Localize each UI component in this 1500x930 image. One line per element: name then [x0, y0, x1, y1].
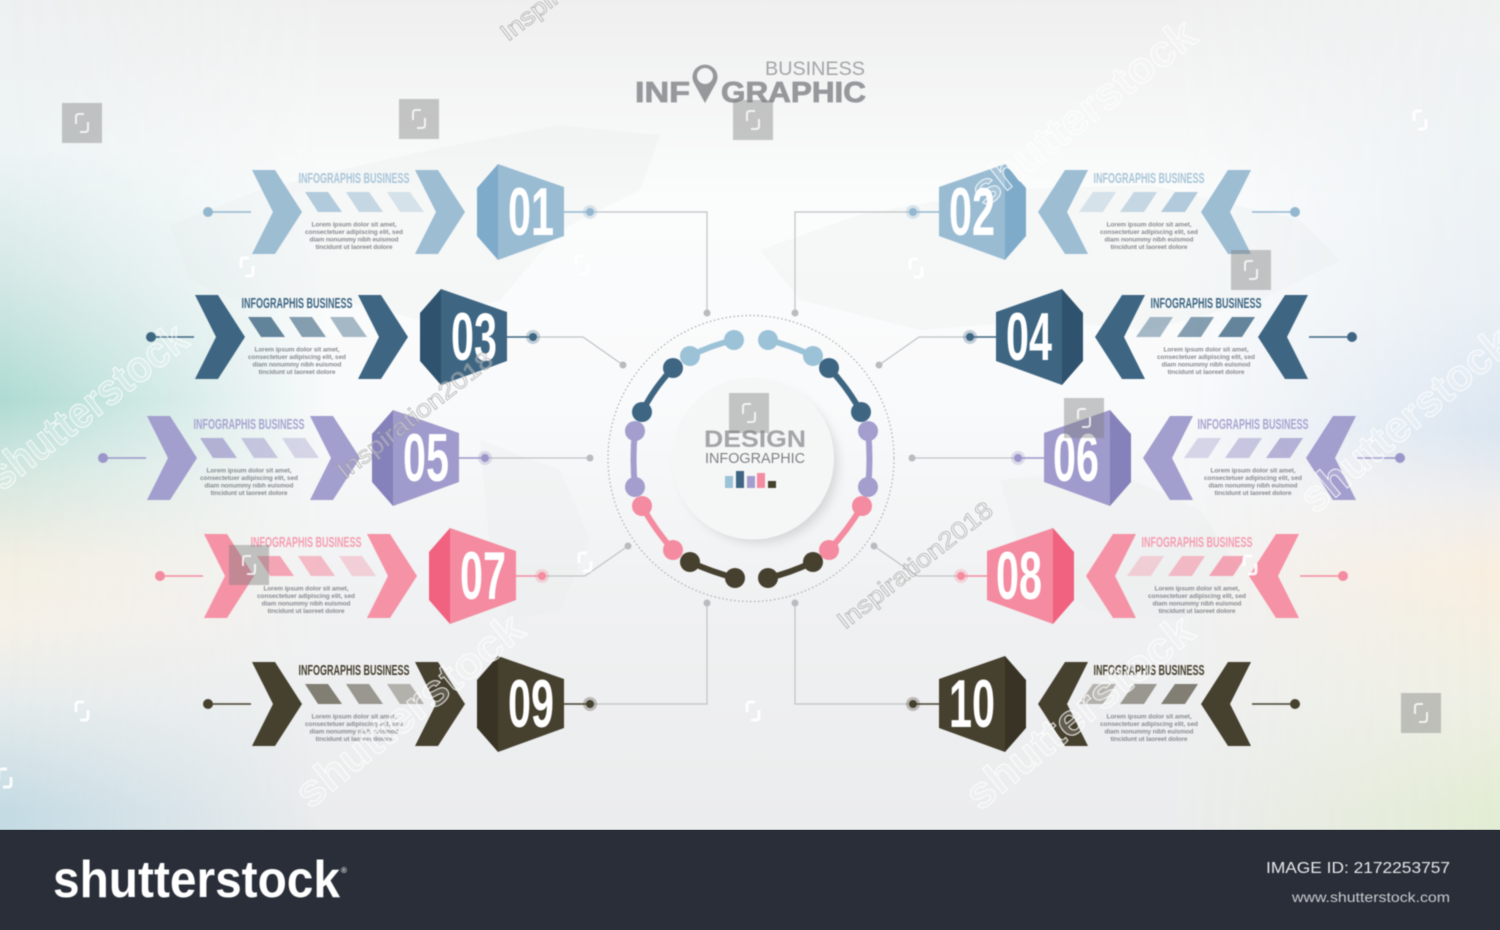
- website: www.shutterstock.com: [1291, 889, 1450, 905]
- step 08 body text: [1148, 586, 1246, 615]
- step 06 body text: Lorem ipsum dolor sit amet,: [1210, 468, 1296, 474]
- title: business infographic: [635, 58, 866, 109]
- watermark text: shutterstock: [961, 9, 1206, 216]
- step 02 body text: [1100, 222, 1198, 251]
- stock watermarks: shutterstock: [955, 605, 1204, 820]
- watermark square icons: [62, 99, 1441, 733]
- faint world map: [170, 125, 1340, 620]
- centre disc: [672, 378, 834, 540]
- step 01 body text: diam nonummy nibh euismod: [310, 236, 399, 244]
- step 10: [792, 600, 1300, 752]
- step 06 heading: INFOGRAPHIS BUSINESS: [1198, 416, 1308, 433]
- footer background: [0, 830, 1500, 930]
- step 10 body text: diam nonummy nibh euismod: [1104, 728, 1194, 736]
- registered mark: ®: [341, 866, 347, 875]
- stock watermarks: shutterstock: [285, 603, 534, 818]
- step 01 body text: tincidunt ut laoreet dolore: [316, 244, 393, 251]
- step 04 body text: tincidunt ut laoreet dolore: [1168, 369, 1245, 376]
- background gradient left: [0, 0, 750, 830]
- step 09: [203, 600, 710, 752]
- step 07 body text: diam nonummy nibh euismod: [262, 600, 351, 608]
- step 10 number: 10: [949, 666, 995, 742]
- step 01 body text: consectetuer adipiscing elit, sed: [305, 229, 403, 236]
- step 03 body text: [248, 346, 346, 376]
- step 07 body text: tincidunt ut laoreet dolore: [268, 608, 345, 615]
- step 07 body text: consectetuer adipiscing elit, sed: [257, 593, 355, 600]
- ring segment: brown: [680, 552, 823, 588]
- step 09 body text: diam nonummy nibh euismod: [310, 728, 399, 736]
- title word: graphic: GRAPHIC: [721, 77, 866, 109]
- image id: IMAGE ID: 2172253757: [1266, 860, 1450, 877]
- step 03 body text: tincidunt ut laoreet dolore: [258, 369, 336, 376]
- background centre glow: [41, 118, 1401, 830]
- step 10 body text: tincidunt ut laoreet dolore: [1110, 736, 1188, 743]
- step 09 body text: Lorem ipsum dolor sit amet,: [312, 714, 397, 720]
- step 06 body text: diam nonummy nibh euismod: [1208, 482, 1298, 490]
- step 10 heading: INFOGRAPHIS BUSINESS: [1094, 662, 1204, 679]
- step 04 shapes: [876, 289, 1357, 385]
- step 02 heading: INFOGRAPHIS BUSINESS: [1094, 170, 1204, 187]
- step 07 number: 07: [460, 538, 506, 614]
- step 07 shapes: [155, 528, 632, 624]
- step 06 shapes: [908, 410, 1405, 506]
- step 04 body text: consectetuer adipiscing elit, sed: [1157, 354, 1255, 361]
- title word: inf: INF: [635, 77, 690, 109]
- step 05 heading: INFOGRAPHIS BUSINESS: [194, 416, 304, 433]
- step 02 number: 02: [949, 174, 995, 250]
- step 10 shapes: [792, 600, 1300, 752]
- step 06 body text: tincidunt ut laoreet dolore: [1214, 490, 1292, 497]
- step 07 body text: [257, 586, 355, 615]
- step 06 number: 06: [1053, 420, 1099, 496]
- step 09 body text: [305, 714, 403, 743]
- step 01 shapes: [203, 164, 710, 316]
- watermark outline icons: [0, 111, 1426, 787]
- step 10 body text: [1100, 714, 1198, 743]
- step 05: [98, 410, 594, 506]
- step 05 body text: tincidunt ut laoreet dolore: [210, 490, 288, 497]
- step 09 body text: consectetuer adipiscing elit, sed: [305, 721, 403, 728]
- step 05 body text: [200, 468, 298, 497]
- step 01 heading: INFOGRAPHIS BUSINESS: [298, 170, 410, 187]
- step 07 heading: INFOGRAPHIS BUSINESS: [250, 534, 362, 551]
- step 07: [155, 528, 632, 624]
- step 02 body text: diam nonummy nibh euismod: [1104, 236, 1194, 244]
- stock watermarks: Inspiration2018: [832, 496, 998, 635]
- mini bar chart: [725, 471, 776, 488]
- step 09 number: 09: [508, 666, 554, 742]
- step 08 body text: Lorem ipsum dolor sit amet,: [1154, 586, 1240, 592]
- step 02 body text: Lorem ipsum dolor sit amet,: [1106, 222, 1192, 228]
- step 02 shapes: [792, 164, 1300, 316]
- step 09 body text: tincidunt ut laoreet dolore: [316, 736, 393, 743]
- step 08 body text: tincidunt ut laoreet dolore: [1158, 608, 1236, 615]
- step 02 body text: tincidunt ut laoreet dolore: [1110, 244, 1188, 251]
- step 02: [792, 164, 1300, 316]
- step 03 shapes: [146, 289, 626, 385]
- ring segment: dark blue: [632, 358, 871, 422]
- step 09 shapes: [203, 600, 710, 752]
- step 03 body text: Lorem ipsum dolor sit amet,: [254, 346, 340, 354]
- step 05 body text: consectetuer adipiscing elit, sed: [200, 475, 298, 482]
- title word: business: BUSINESS: [765, 58, 865, 80]
- step 04 body text: diam nonummy nibh euismod: [1162, 362, 1251, 368]
- step 01: [203, 164, 710, 316]
- dotted outer circle: [608, 316, 894, 602]
- background gradient right: [750, 0, 1500, 830]
- step 03 body text: diam nonummy nibh euismod: [252, 362, 342, 368]
- step 03 number: 03: [451, 299, 497, 375]
- ring segment: light blue: [680, 330, 823, 366]
- step 01 body text: [305, 222, 403, 251]
- ring segment: pink: [632, 496, 872, 560]
- step 05 body text: diam nonummy nibh euismod: [204, 482, 294, 490]
- central ring diagram: [608, 316, 894, 602]
- ring segment: purple: [625, 421, 878, 497]
- step 08 number: 08: [996, 538, 1042, 614]
- step 06 body text: consectetuer adipiscing elit, sed: [1204, 475, 1302, 482]
- step 08 body text: diam nonummy nibh euismod: [1152, 600, 1242, 608]
- step 04 number: 04: [1006, 299, 1052, 375]
- step 07 body text: Lorem ipsum dolor sit amet,: [264, 586, 349, 592]
- step 08 body text: consectetuer adipiscing elit, sed: [1148, 593, 1246, 600]
- footer bar: [0, 830, 1500, 930]
- step 08: [870, 528, 1348, 624]
- step 08 heading: INFOGRAPHIS BUSINESS: [1142, 534, 1252, 551]
- step 04 heading: INFOGRAPHIS BUSINESS: [1150, 295, 1262, 312]
- step 05 body text: Lorem ipsum dolor sit amet,: [206, 468, 292, 474]
- centre heading: design: DESIGN: [704, 426, 806, 453]
- step 09 heading: INFOGRAPHIS BUSINESS: [298, 662, 410, 679]
- centre disc shadow: [680, 387, 838, 543]
- step 06: [908, 410, 1405, 506]
- stock watermarks: Inspiration2018: [332, 346, 498, 485]
- step 08 shapes: [870, 528, 1348, 624]
- shutterstock logo: shutterstock: [53, 851, 340, 909]
- step 01 number: 01: [508, 174, 554, 250]
- step 03 body text: consectetuer adipiscing elit, sed: [248, 354, 346, 361]
- step 10 body text: Lorem ipsum dolor sit amet,: [1106, 714, 1192, 720]
- step 04: [876, 289, 1357, 385]
- step 01 body text: Lorem ipsum dolor sit amet,: [312, 222, 397, 228]
- step 10 body text: consectetuer adipiscing elit, sed: [1100, 721, 1198, 728]
- step 05 number: 05: [403, 420, 449, 496]
- step 03: [146, 289, 626, 385]
- step 05 shapes: [98, 410, 594, 506]
- step 06 body text: [1204, 468, 1302, 497]
- icon: location pin: [692, 65, 718, 103]
- step 04 body text: Lorem ipsum dolor sit amet,: [1164, 346, 1249, 354]
- step 03 heading: INFOGRAPHIS BUSINESS: [242, 295, 352, 312]
- centre heading: infographic: INFOGRAPHIC: [705, 450, 805, 467]
- step 04 body text: [1157, 346, 1255, 376]
- step 02 body text: consectetuer adipiscing elit, sed: [1100, 229, 1198, 236]
